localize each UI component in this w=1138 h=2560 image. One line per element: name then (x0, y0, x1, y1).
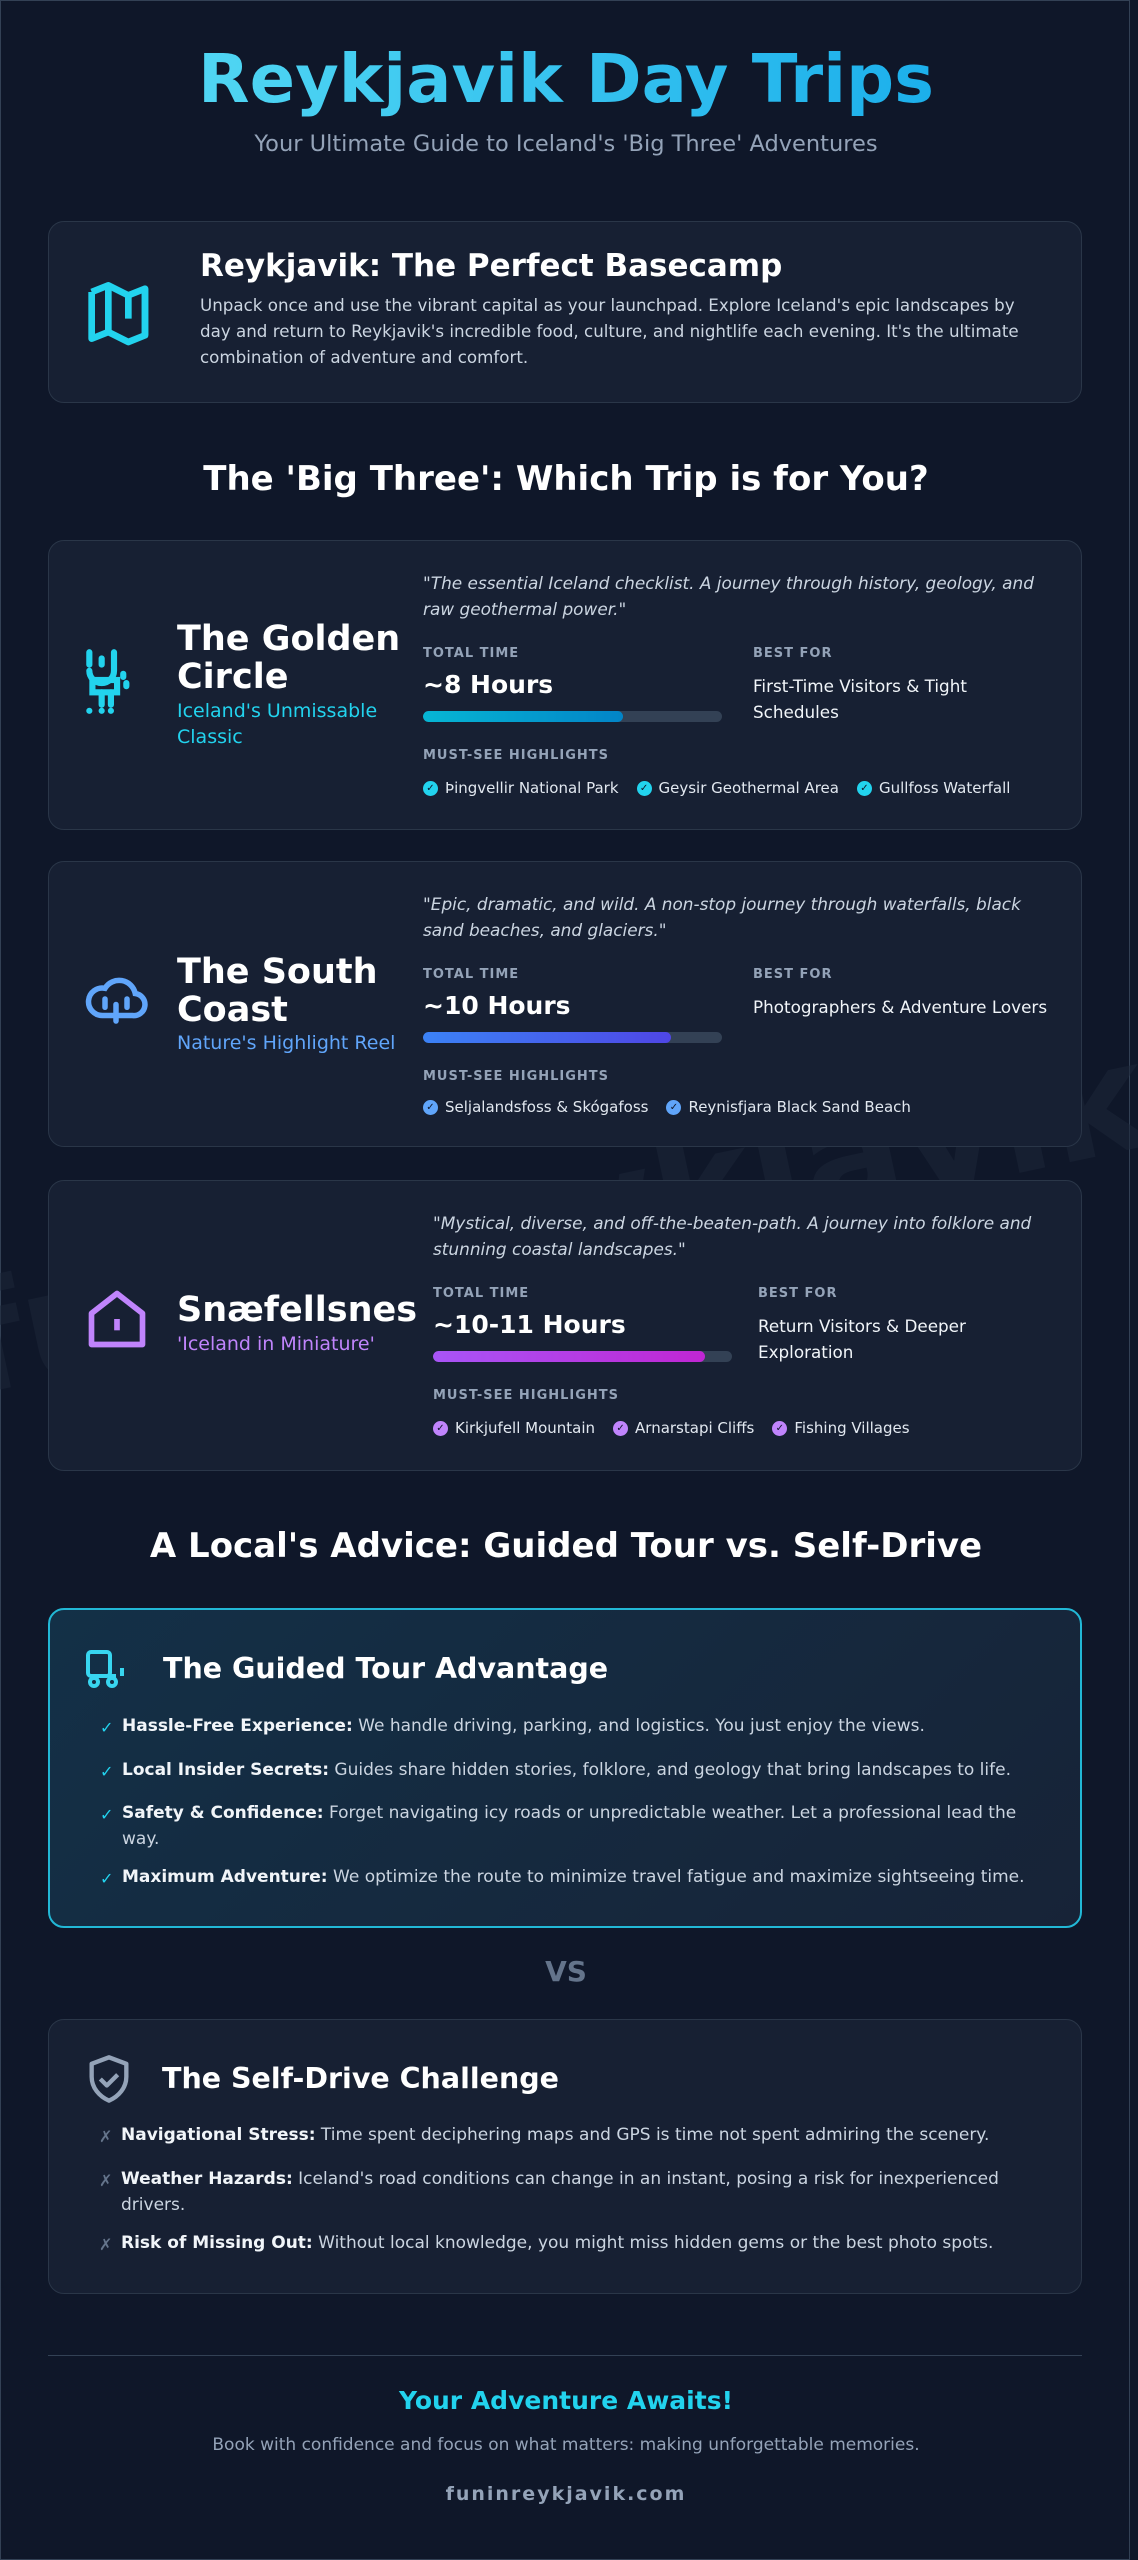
title (1, 39, 1131, 119)
footer heading: Your Adventure Awaits! (399, 2386, 733, 2415)
best for: BEST FOR (753, 967, 832, 982)
panel: south coast: ✓ (426, 1102, 435, 1112)
panel: snaefellsnes: Arnarstapi Cliffs (635, 1419, 754, 1437)
panel: golden circle: First-Time Visitors & Tight Schedules (753, 676, 967, 722)
icon: geyser (86, 649, 130, 714)
panel: south coast: Reynisfjara Black Sand Beach (688, 1098, 911, 1116)
quote: "The essential Iceland checklist. A journey through history, geology, and raw geothermal power." (423, 573, 1034, 619)
panel: snaefellsnes: ✓ (776, 1422, 784, 1434)
list: Local Insider Secrets: Guides share hidden stories, folklore, and geology that bring landscapes to life. (122, 1760, 1011, 1780)
panel: south coast: Photographers & Adventure Lovers (753, 997, 1047, 1017)
progress bar (433, 1351, 732, 1362)
panel: golden circle: ✓ (640, 782, 648, 794)
panel: self-drive (48, 2019, 1082, 2294)
panel: snaefellsnes: ✓ (616, 1422, 625, 1434)
heading: The Guided Tour Advantage (163, 1652, 608, 1685)
panel: snaefellsnes: ✓ (436, 1422, 445, 1434)
highlights: MUST-SEE HIGHLIGHTS (423, 748, 609, 763)
heading: big three: The 'Big Three': Which Trip is for You? (203, 459, 929, 499)
vs: VS (545, 1955, 587, 1988)
list: ✓ (100, 1805, 113, 1824)
panel: snaefellsnes: Kirkjufell Mountain (455, 1419, 595, 1437)
list: ✗ (99, 2127, 112, 2146)
list: Weather Hazards: Iceland's road conditions can change in an instant, posing a risk for inexperienced drivers. (121, 2169, 999, 2215)
heading: The Self-Drive Challenge (162, 2062, 559, 2095)
panel: golden circle: ✓ (426, 782, 435, 794)
list: Safety & Confidence: Forget navigating icy roads or unpredictable weather. Let a professional lead the way. (122, 1803, 1016, 1849)
icon: map (88, 282, 148, 346)
title: Snæfellsnes (177, 1290, 417, 1330)
list: Hassle-Free Experience: We handle driving, parking, and logistics. You just enjoy the views. (122, 1716, 925, 1736)
list: Maximum Adventure: We optimize the route to minimize travel fatigue and maximize sightseeing time. (122, 1867, 1025, 1887)
heading: Reykjavik: The Perfect Basecamp (200, 248, 782, 284)
panel: golden circle: Gullfoss Waterfall (879, 779, 1010, 797)
list: ✗ (99, 2171, 112, 2190)
total time: TOTAL TIME (423, 967, 519, 982)
icon: bus (86, 1650, 124, 1688)
panel: snaefellsnes: Fishing Villages (794, 1419, 910, 1437)
list: ✓ (100, 1869, 113, 1888)
subtitle: 'Iceland in Miniature' (177, 1333, 375, 1355)
list: ✓ (100, 1762, 113, 1781)
list: ✓ (100, 1718, 113, 1737)
panel: guided tour (48, 1608, 1082, 1928)
title: The Golden Circle (177, 619, 400, 697)
title: The South Coast (177, 952, 378, 1030)
quote: "Epic, dramatic, and wild. A non-stop journey through waterfalls, black sand beaches, and glaciers." (423, 894, 1021, 940)
panel: south coast: ✓ (670, 1102, 678, 1112)
highlights: MUST-SEE HIGHLIGHTS (433, 1388, 619, 1403)
subtitle: Iceland's Unmissable Classic (177, 700, 377, 748)
subtitle: Your Ultimate Guide to Iceland's 'Big Three' Adventures (254, 131, 878, 157)
footer text: Book with confidence and focus on what matters: making unforgettable memories. (212, 2435, 920, 2455)
heading: advice: A Local's Advice: Guided Tour vs. Self-Drive (150, 1526, 982, 1566)
progress bar (423, 1032, 722, 1043)
panel: golden circle: ~8 Hours (423, 670, 553, 699)
panel: golden circle (48, 540, 1082, 830)
list: Navigational Stress: Time spent deciphering maps and GPS is time not spent admiring the scenery. (121, 2125, 989, 2145)
panel: snaefellsnes: Return Visitors & Deeper Exploration (758, 1316, 966, 1362)
icon: cloud (86, 978, 148, 1024)
list (99, 2125, 999, 2254)
icon: house (88, 1290, 146, 1348)
best for: BEST FOR (753, 646, 832, 661)
list (100, 1716, 1025, 1888)
title: Reykjavik Day Trips (198, 40, 934, 118)
panel: basecamp (48, 221, 1082, 403)
list: ✗ (99, 2235, 112, 2254)
progress bar (423, 711, 722, 722)
panel: snaefellsnes: ~10-11 Hours (433, 1310, 626, 1339)
text block: Unpack once and use the vibrant capital as your launchpad. Explore Iceland's epic landscapes by day and return to Reykjavik's incredible food, culture, and nightlife each evening. It's the ultimate combination of adventure and comfort. (200, 295, 1019, 367)
panel: golden circle: Geysir Geothermal Area (659, 779, 839, 797)
list: Risk of Missing Out: Without local knowledge, you might miss hidden gems or the best photo spots. (121, 2233, 993, 2253)
total time: TOTAL TIME (433, 1286, 529, 1301)
total time: TOTAL TIME (423, 646, 519, 661)
panel: south coast: Seljalandsfoss & Skógafoss (445, 1098, 648, 1116)
panel: golden circle: Þingvellir National Park (445, 779, 619, 797)
quote: "Mystical, diverse, and off-the-beaten-path. A journey into folklore and stunning coastal landscapes." (433, 1213, 1031, 1259)
footer site: funinreykjavik.com (446, 2483, 686, 2505)
panel: snaefellsnes (48, 1180, 1082, 1471)
best for: BEST FOR (758, 1286, 838, 1301)
panel: south coast (48, 861, 1082, 1147)
icon: shield (90, 2055, 128, 2103)
panel: golden circle: ✓ (860, 782, 869, 794)
highlights: MUST-SEE HIGHLIGHTS (423, 1069, 609, 1084)
panel: south coast: ~10 Hours (423, 991, 571, 1020)
subtitle: Nature's Highlight Reel (177, 1032, 395, 1054)
